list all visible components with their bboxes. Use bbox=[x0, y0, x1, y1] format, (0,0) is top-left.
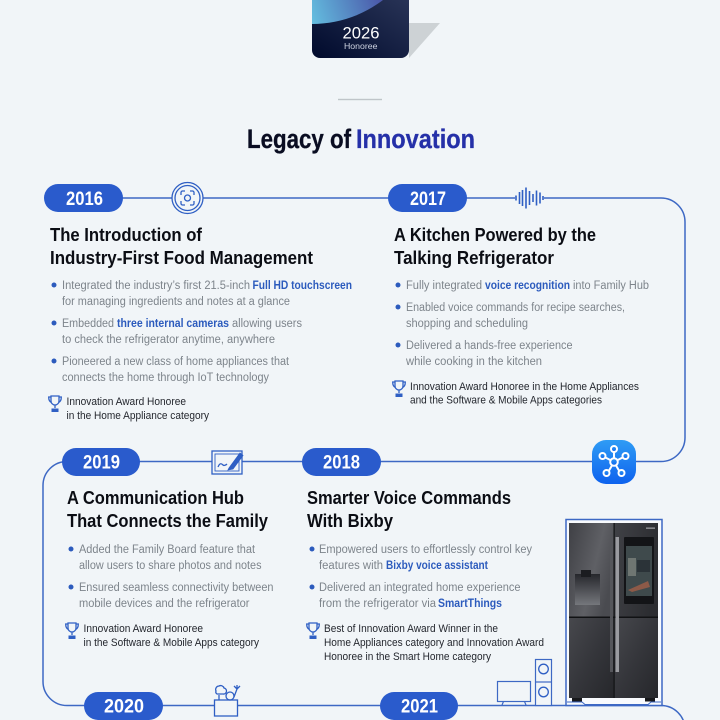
award badge: Honoree bbox=[344, 41, 378, 51]
year 2019 pill: 2019 bbox=[83, 452, 120, 474]
icon: SmartThings app bbox=[592, 440, 636, 484]
bullets: 2018: Bixby voice assistant bbox=[386, 560, 488, 572]
award text: 2016 bbox=[66, 396, 210, 422]
heading: 2019: That Connects the Family bbox=[67, 510, 269, 531]
icon: groceries bbox=[214, 685, 240, 716]
icon: trophy bbox=[49, 396, 61, 412]
bullets: 2018: from the refrigerator via bbox=[319, 598, 437, 610]
heading: 2018: With Bixby bbox=[307, 510, 394, 531]
bullets: 2016: to check the refrigerator anytime, anywhere bbox=[62, 334, 275, 346]
icon: sound wave bbox=[515, 186, 544, 210]
award badge bbox=[312, 0, 440, 58]
award text: 2016: Innovation Award Honoree bbox=[66, 396, 186, 408]
year 2021 pill bbox=[380, 692, 458, 720]
title: Innovation bbox=[356, 124, 475, 154]
heading: 2017: A Kitchen Powered by the bbox=[394, 224, 596, 245]
bullets: 2019: mobile devices and the refrigerator bbox=[79, 598, 250, 610]
award text: 2019 bbox=[84, 623, 260, 649]
heading: 2016 bbox=[50, 224, 313, 268]
panel: 2016 bbox=[49, 224, 352, 422]
bullets: 2019: Ensured seamless connectivity between bbox=[79, 582, 274, 594]
award text: 2018 bbox=[324, 623, 544, 663]
heading: 2016: Industry-First Food Management bbox=[50, 247, 313, 268]
bullets: 2019: Added the Family Board feature that bbox=[79, 544, 256, 556]
year 2018 pill: 2018 bbox=[323, 452, 360, 474]
bullets: 2018: Delivered an integrated home experience bbox=[319, 582, 520, 594]
bullets: 2018: features with bbox=[319, 560, 383, 572]
icon: family board pen bbox=[212, 451, 243, 474]
bullets: 2016: three internal cameras bbox=[117, 318, 229, 330]
year 2018 pill bbox=[302, 448, 381, 476]
bullets: 2016: Pioneered a new class of home appliances that bbox=[62, 356, 290, 368]
title bbox=[247, 124, 475, 154]
bullets: 2016: Embedded bbox=[62, 318, 114, 330]
icon: television bbox=[498, 682, 530, 705]
panel: 2019 bbox=[66, 487, 274, 649]
bullets: 2017: into Family Hub bbox=[573, 280, 649, 292]
award text: 2019: in the Software & Mobile Apps category bbox=[84, 637, 260, 649]
icon: camera circle bbox=[172, 182, 203, 214]
year 2020 pill: 2020 bbox=[104, 696, 144, 718]
heading: 2017: Talking Refrigerator bbox=[394, 247, 554, 268]
award text: 2017: Innovation Award Honoree in the Home Appliances bbox=[410, 381, 640, 393]
bullets: 2017 bbox=[396, 280, 649, 368]
award text: 2019: Innovation Award Honoree bbox=[84, 623, 203, 635]
panel: 2017 bbox=[393, 224, 649, 406]
year 2017 pill: 2017 bbox=[410, 189, 446, 210]
heading: 2018: Smarter Voice Commands bbox=[307, 487, 511, 508]
heading: 2016: The Introduction of bbox=[50, 224, 203, 245]
year 2020 pill bbox=[84, 692, 163, 720]
bullets: 2017: Fully integrated bbox=[406, 280, 482, 292]
bullets: 2017: shopping and scheduling bbox=[406, 318, 528, 330]
award text: 2016: in the Home Appliance category bbox=[66, 410, 210, 422]
award text: 2017 bbox=[410, 381, 640, 406]
bullets: 2018: SmartThings bbox=[438, 598, 502, 610]
bullets: 2016: allowing users bbox=[232, 318, 302, 330]
bullets: 2018 bbox=[310, 544, 532, 610]
bullets: 2016 bbox=[52, 280, 352, 384]
bullets: 2017: Delivered a hands-free experience bbox=[406, 340, 572, 352]
timeline path bbox=[43, 198, 685, 720]
bullets: 2017: while cooking in the kitchen bbox=[405, 356, 542, 368]
award text: 2018: Honoree in the Smart Home category bbox=[324, 651, 492, 663]
bullets: 2016: connects the home through IoT technology bbox=[62, 372, 269, 384]
award badge: 2026 bbox=[342, 24, 380, 42]
refrigerator bbox=[566, 520, 662, 706]
year 2021 pill: 2021 bbox=[401, 696, 438, 718]
year 2016 pill bbox=[44, 184, 123, 212]
bullets: 2016: for managing ingredients and notes at a glance bbox=[62, 296, 290, 308]
heading: 2019 bbox=[67, 487, 269, 531]
award text: 2018: Home Appliances category and Innovation Award bbox=[324, 637, 544, 649]
year 2017 pill bbox=[388, 184, 467, 212]
heading: 2018 bbox=[307, 487, 511, 531]
icon: speakers bbox=[536, 660, 552, 706]
bullets: 2017: Enabled voice commands for recipe searches, bbox=[406, 302, 625, 314]
icon: trophy bbox=[393, 381, 405, 397]
bullets: 2019 bbox=[68, 544, 274, 610]
bullets: 2018: Empowered users to effortlessly control key bbox=[319, 544, 532, 556]
icon: trophy bbox=[66, 623, 78, 639]
bullets: 2016: Full HD touchscreen bbox=[252, 280, 352, 292]
year 2016 pill: 2016 bbox=[66, 189, 103, 210]
bullets: 2017: voice recognition bbox=[485, 280, 570, 292]
award text: 2018: Best of Innovation Award Winner in the bbox=[324, 623, 498, 635]
bullets: 2019: allow users to share photos and notes bbox=[79, 560, 262, 572]
icon: trophy bbox=[307, 623, 319, 639]
title: Legacy of bbox=[247, 124, 352, 154]
bullets: 2016: Integrated the industry’s first 21.5-inch bbox=[62, 280, 250, 292]
year 2019 pill bbox=[62, 448, 140, 476]
heading: 2019: A Communication Hub bbox=[67, 487, 244, 508]
award text: 2017: and the Software & Mobile Apps categories bbox=[410, 394, 603, 406]
heading: 2017 bbox=[394, 224, 596, 268]
panel: 2018 bbox=[307, 487, 544, 663]
